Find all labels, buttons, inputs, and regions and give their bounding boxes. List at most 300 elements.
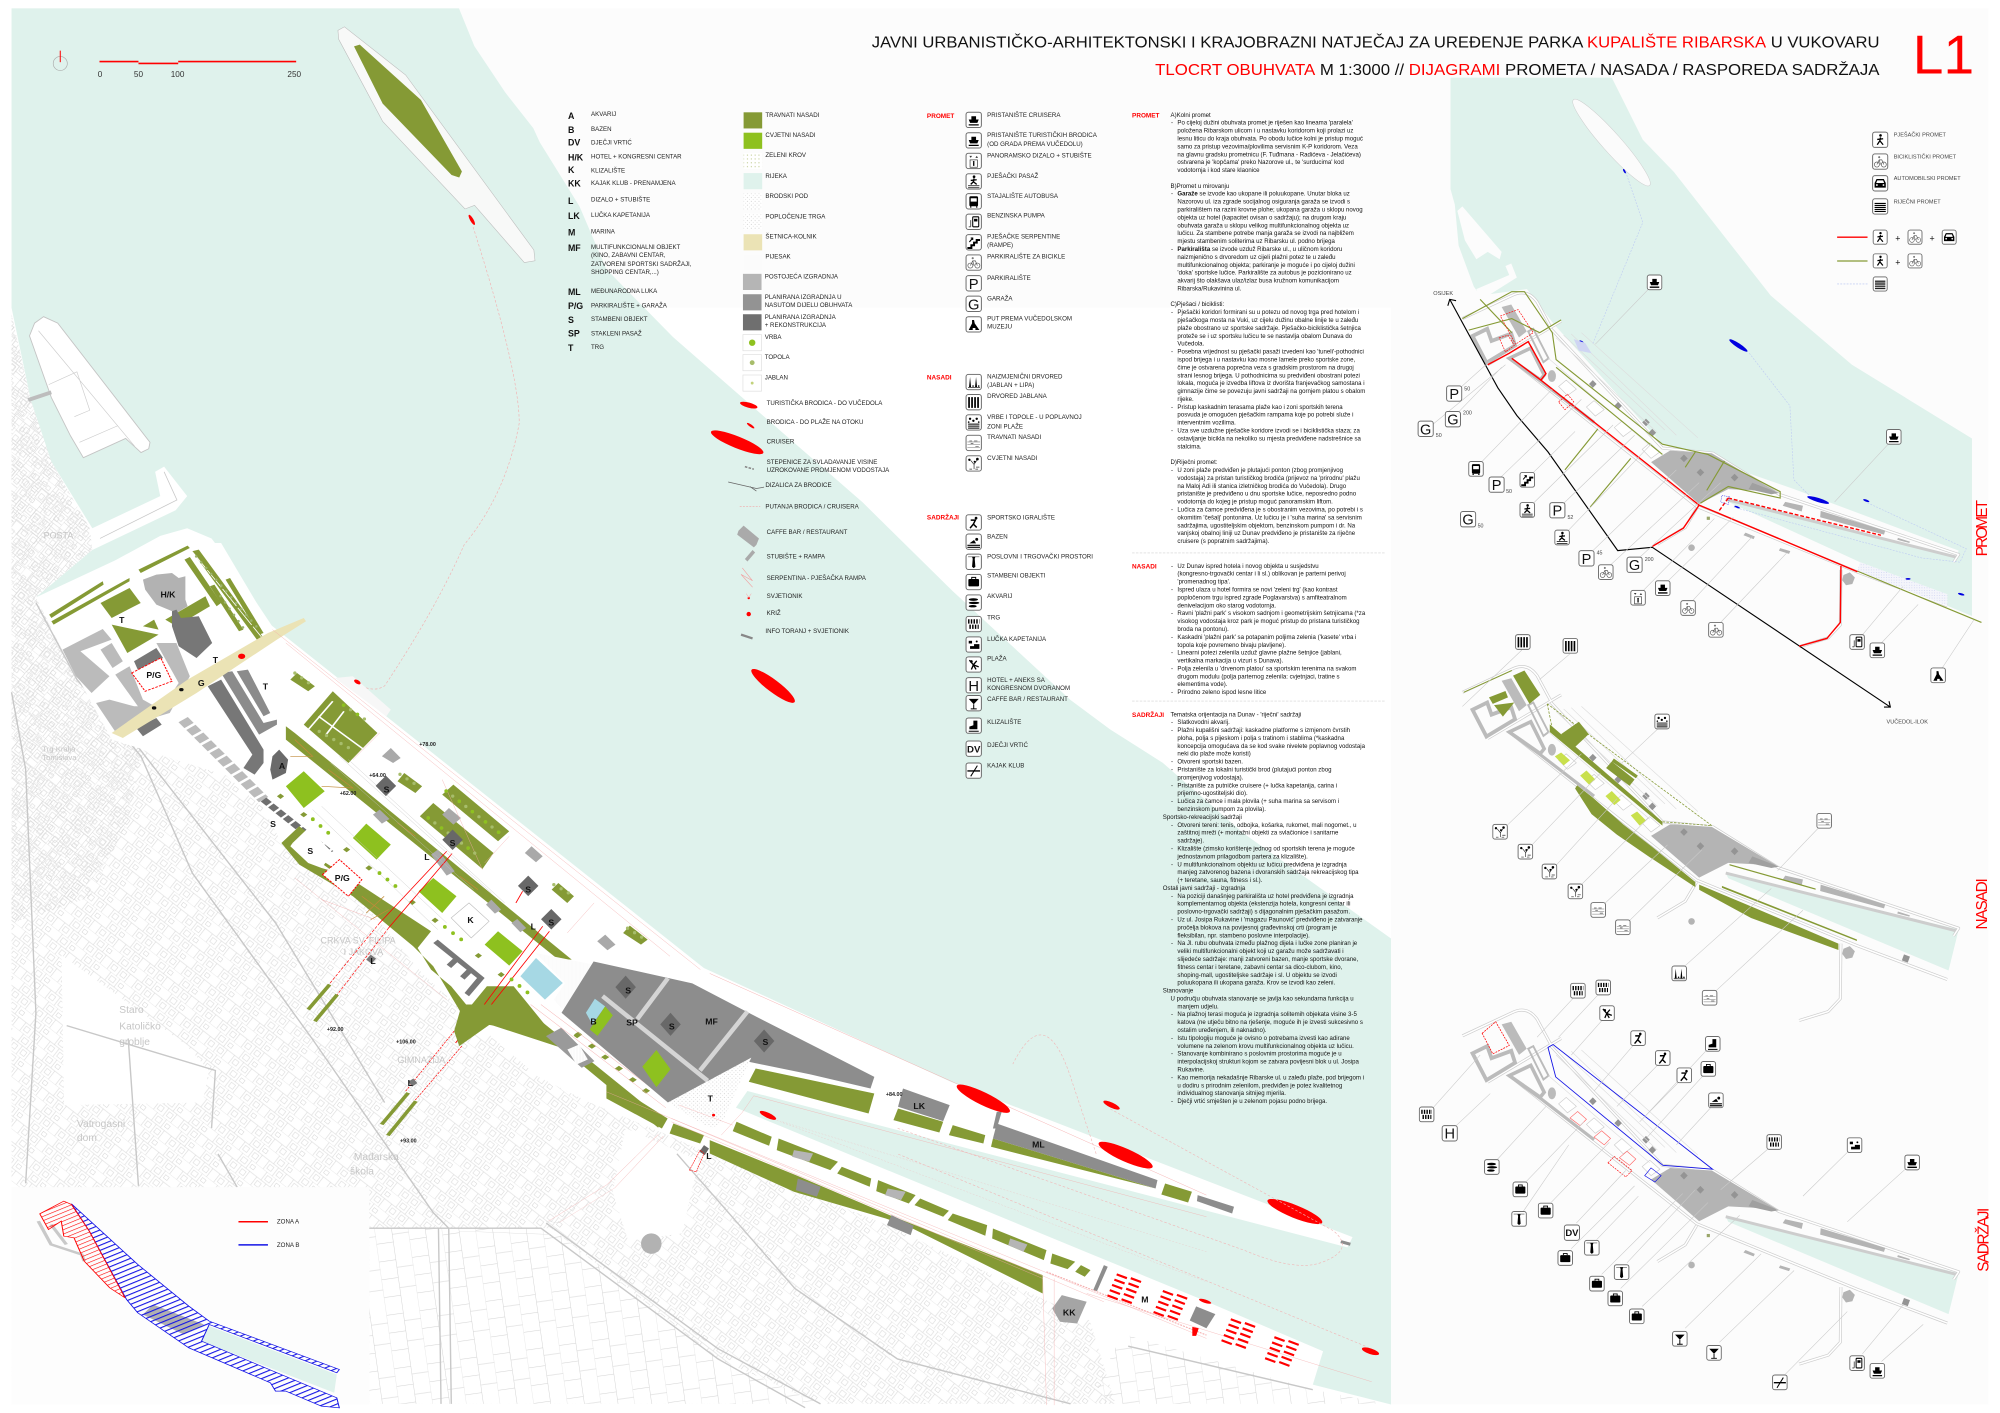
row [966,593,1012,610]
text block: promet: Ribarska/Rukavinina ul. [1177,285,1242,292]
icon: stairs [1520,472,1535,487]
row [966,172,1039,189]
row [966,294,1013,313]
plan building code labels: SP [626,1018,638,1028]
legend: building codes: DIZALO + STUBIŠTE [591,197,650,204]
plan building code labels: L [706,1151,712,1161]
legend: building codes: STAKLENI PASAŽ [591,330,642,338]
text block: promet: gimnazije čime se povezuju javni sadržaji na gornjem platou s obalom [1177,388,1365,395]
legend: building codes: HOTEL + KONGRESNI CENTAR [591,153,682,160]
icon: garage 50 [1461,512,1484,530]
icon: parking 50: P [1492,478,1501,494]
legend: materials and planting: CRUISER [767,439,794,446]
icon: parking 50: P [1449,387,1459,403]
text block: sadrzaji: ostalim uređenjem, ili naknadno). [1177,1027,1267,1034]
icon: passage [1520,503,1535,517]
text block: sadrzaji: fitness centar i teretane, zabavni centar sa dico-clubom, kino, [1177,964,1343,971]
row: AKVARIJ [987,593,1012,600]
text block: promet: A)Kolni promet [1171,112,1211,119]
text block: nasadi: Kaskadni 'plažni park' sa potapanim poljima zelenia ('kasete' vrba i [1177,634,1356,641]
row [966,112,1061,128]
scale bar: 0 [98,70,103,79]
red roads [1488,310,1881,646]
legend: pictograms sadrzaji [927,513,1093,778]
text block: sadrzaji: - [1171,1035,1173,1042]
icon: people [1571,983,1585,998]
legend: building codes: STAMBENI OBJEKT [591,316,648,323]
legend: building codes: LK [568,211,580,221]
grey place labels: I JAKOVA [344,947,383,957]
legend: building codes: S [568,315,574,325]
text block: sadrzaji: Na Jl. rubu obuhvata između plažnog dijela i lučke zone planiran je [1177,940,1358,947]
row: (JABLAN + LIPA) [987,382,1034,389]
text block: sadrzaji: komplementarnog objekta (ekstenzija hotela, kongresni centar ili [1177,901,1350,908]
row: POSLOVNI I TRGOVAČKI PROSTORI [987,553,1093,560]
row: PUT PREMA VUČEDOLSKOM [987,315,1072,322]
hatched dock strip [1857,562,1947,606]
legend: materials and planting [728,112,890,638]
legend: materials and planting: KRIŽ [767,609,781,617]
icon: passage [1555,530,1569,545]
elevation labels: +93.00 [400,1138,417,1144]
plan building code labels: G [198,678,205,688]
peninsula [1457,206,1502,259]
land base [12,308,1391,1404]
plan building code labels: S [307,846,313,856]
text block: promet: multifunkcionalnog objekta; parkiranje je moguće i po cijeloj dužini [1177,262,1355,269]
plan building code labels: S [450,838,456,848]
icon: parking 45: 45 [1597,550,1603,556]
text block: sadrzaji: - [1171,759,1173,766]
row [966,234,1060,250]
row [966,718,1021,733]
text block: sadrzaji: promjenjivog vodostaja). [1177,774,1244,781]
text block: sadrzaji: jednostavnom prilagodbom partera za klizalište). [1176,853,1308,860]
icon: fuel [1850,635,1864,649]
row [966,515,1055,530]
olive pedestrian and cycle routes [1462,292,1981,622]
icon: people [1767,1135,1781,1149]
plan building code labels: S [384,784,390,794]
swatch: pijesak [744,254,762,270]
text block: sadrzaji: - [1171,1051,1173,1058]
row: H [968,679,979,695]
row: STAMBENI OBJEKTI [987,573,1046,580]
elevation labels: +84.00 [886,1092,902,1098]
grey place labels [42,530,445,1177]
row [966,393,1048,410]
icon: suitcase [1608,1291,1623,1306]
text block: nasadi: Linearni potezi zelenila uzduž glavne plažne šetnjice (jablani, [1177,650,1342,657]
breakwater detail [100,472,177,538]
text block: promet: - [1171,404,1173,411]
row: P [969,277,979,293]
text block: sadrzaji: Sportsko-rekreacijski sadržaji [1163,814,1242,821]
row [966,213,1046,229]
symbol: island boat [746,422,755,429]
icon: ship [1870,643,1885,658]
plan building code labels: S [525,884,531,894]
text block: sadrzaji: poluukopana ili ukopana garaža. Krov se izvodi kao zeleni. [1177,980,1336,987]
elevation labels: +64.00 [369,773,386,779]
plan building code labels: T [119,615,125,625]
legend: materials and planting: TOPOLA [765,354,790,361]
legend: building codes: MEĐUNARODNA LUKA [591,288,658,295]
text block: nasadi: visokog vodostaja kroz park je moguć pristup do pristana turističkog [1177,618,1360,625]
legend: building codes: KAJAK KLUB - PRENAMJENA [591,180,677,187]
legend: building codes: M [568,228,575,238]
swatch: postojeca izgradnja [743,274,762,290]
icon: flowers [1493,824,1507,839]
main plan: hotel district [45,543,447,1000]
text block: promet: parkiralištem na razini krovne plohe; ukopana garaža u sklopu novog [1177,207,1363,214]
text block: promet: mjestu stambenim soliterima uz Ribarsku ul. podno brijega [1177,238,1335,245]
swatch: poplocenje [744,213,762,230]
grey place labels: dom [77,1133,97,1144]
diagram: nasadi [1462,635,1959,1021]
text block: promet: sadržajima, ugostiteljskim objektom, benzinskom pumpom i dr. Na [1177,522,1356,529]
combo: red line: + [1930,234,1935,244]
text block: sadrzaji: - [1171,940,1173,947]
row [966,614,1000,632]
legend: building codes: SP [568,329,580,339]
row [966,677,1070,695]
swatch: planirana rekonstrukcija [743,314,762,330]
text block: promet: - [1171,349,1173,356]
plan building code labels: P/G [335,873,350,883]
marina boats and cruisers [709,426,1380,1357]
text block: sadrzaji: Rukavine. [1177,1066,1205,1073]
row: STAJALIŠTE AUTOBUSA [987,193,1059,200]
icon: bike [1598,565,1613,579]
text block: nasadi: broda na pontonu). [1177,626,1229,633]
icon: garage 200 [1627,557,1654,574]
text block: sadrzaji: - [1171,893,1173,900]
symbol: lighthouse [746,594,751,599]
row [966,455,1038,471]
icon: garage 200: G [1629,558,1640,574]
legend: building codes: MULTIFUNKCIONALNI OBJEKT [591,244,681,251]
zone legend: ZONA B [277,1242,299,1249]
text block: promet: ostvarena je 'kopčama' preko Nazorove ul., te 'surducima' kod [1177,159,1344,166]
symbol: serpentine [741,568,753,587]
zone legend [238,1219,300,1249]
icon: ship [1887,429,1901,444]
plan building code labels: A [279,761,286,771]
grey place labels: CRKVA SV. FILIPA [321,936,396,946]
legend: materials and planting: SVJETIONIK [767,593,803,600]
main plan: park olive strips and parcels [270,630,700,1043]
plan building code labels: H/K [160,589,176,599]
text block: sadrzaji: - [1171,719,1173,726]
text block: promet: lučicu. Za stambene potrebe manja garaža se izvodi na najbližem [1177,230,1354,237]
river Danube and Vuka [12,8,1391,1404]
legend: building codes: ZATVORENI SPORTSKI SADRŽAJI, [591,260,692,268]
plan building code labels: S [669,1021,675,1031]
basin [1726,1217,1959,1314]
scale bar [98,62,302,79]
legend: pictograms nasadi [927,374,1082,471]
legend: pictograms sadrzaji: SADRŽAJI [927,513,959,522]
map: city cadastral background [12,314,1387,1408]
title [872,34,1880,79]
island outline [1566,93,1657,192]
row [966,553,1093,569]
marina service building [1190,1306,1215,1328]
icon: parking 52: P [1552,504,1562,520]
text block: sadrzaji: Tematska orijentacija na Dunav - 'riječni' sadržaji [1171,711,1301,718]
text block: promet: obuhvata garaža u sklopu velikog multifunkcionalnog objekta uz [1177,222,1349,229]
text block: nasadi: - [1171,650,1173,657]
grey place labels: GIMNAZIJA [397,1055,445,1065]
legend: building codes: B [568,125,574,135]
text block: sadrzaji: Pristanište za putničke cruisere (+ lučka kapetanija, carina i [1177,782,1337,789]
row: PRISTANIŠTE CRUISERA [987,112,1061,119]
legend: materials and planting: BRODSKI POD [765,193,809,200]
text block: sadrzaji: slijedeće sadržaje: manji zatvoreni bazen, manje sportske dvorane, [1177,956,1358,963]
icon: suitcase [1513,1182,1528,1197]
row: BENZINSKA PUMPA [987,213,1046,220]
legend: building codes: (KINO, ZABAVNI CENTAR, [591,252,666,259]
icon: garage 50 [1418,421,1442,439]
base plan [1462,667,1959,1021]
boat route dashed line [362,227,519,689]
icon: flowers [1518,844,1533,859]
text block: promet: okomitim 'češalj' pontonima. Uz lučicu je i 'suha marina' sa servisnim [1177,514,1362,521]
icon: skating [1705,1037,1720,1051]
text block: sadrzaji: Na poziciji današnjeg parkirališta uz hotel predviđena je izgradnja [1177,893,1354,900]
grey place labels: Staro [119,1005,144,1016]
icon: tie [1585,1240,1599,1255]
row: (RAMPE) [987,242,1013,249]
icon: garage 50: G [1420,422,1431,438]
text block: promet: se izvode uzduž Ribarske ul., u uličnom koridoru [1210,246,1342,253]
icon: harbour [1847,1138,1862,1153]
text block: sadrzaji: (+ teretane, sauna, fitness i sl.). [1177,877,1263,884]
plan building code labels: S [625,986,631,996]
text block: promet: položena Ribarskom ulicom i u nastavku koridorom koji prolazi uz [1177,128,1353,135]
legend: materials and planting: TRAVNATI NASADI [765,112,820,119]
text block: sadrzaji: manjem udjelu. [1177,1003,1219,1010]
row: CAFFE BAR / RESTAURANT [987,696,1068,703]
text block: sadrzaji: interpolacijskoj strukturi kojom se zatvara povijesni blok u ul. Josipa [1177,1059,1359,1066]
text block: nasadi [1132,563,1367,696]
icon: lift [1631,590,1645,605]
legend row: cycling: BICIKLISTIČKI PROMET [1894,154,1957,161]
island with planting [338,27,535,263]
row: TRAVNATI NASADI [987,434,1041,441]
text block: promet: na Maloj Adi ili stanica izletničkog brodića do Vučedola). Drugo [1177,483,1347,490]
text block: nasadi: Ispred ulaza u hotel formira se novi 'zeleni trg' (kao kontrast [1177,586,1338,593]
icon: tie [1512,1212,1526,1226]
legend: pictograms nasadi: NASADI [927,374,952,381]
plan building code labels: L [408,1078,414,1088]
icon: people [1596,980,1611,995]
row: KAJAK KLUB [987,763,1024,770]
multifunctional building MF [562,962,874,1103]
marina and pier parcels [606,973,1372,1405]
text block: sadrzaji: koncepcija omogućava da se kod svake nivelete poplavnog vodostaja [1177,743,1366,750]
text block: nasadi: denivelacijom oko starog vodotornja. [1177,602,1276,609]
text block: nasadi: Polja zelenila u 'drvenom platou' sa sportskim terenima na svakom [1177,665,1356,672]
text block: promet: naizmjenično s drvoredom uz cijeli plažni potez te u zaleđu [1177,254,1336,261]
row: MUZEJU [987,324,1012,331]
swatch: rijeka [744,173,762,189]
text block: sadrzaji: SADRŽAJI [1132,710,1164,719]
row: BAZEN [987,534,1008,541]
text block: sadrzaji: manjeg zatvorenog bazena i dvoranskih sadržaja rekreacijskog tipa [1177,869,1359,876]
text block: sadrzaji: Slatkovodni akvarij. [1177,719,1230,726]
icon: bike [1709,622,1723,637]
legend: materials and planting: + REKONSTRUKCIJA [765,322,827,329]
promet legend [1837,132,1961,291]
row: PRISTANIŠTE TURISTIČKIH BRODICA [987,132,1097,139]
swatch: planirana izgradnja nasip [743,294,762,310]
icon: cocktail [1673,1331,1687,1346]
text block: sadrzaji: Istu tipologiju moguće je ovisno o potrebama izvesti kao adirane [1177,1035,1350,1042]
leader lines [1432,992,1923,1374]
text block: sadrzaji: - [1171,861,1173,868]
river in promet diagram [1450,78,1972,616]
text block: promet: C)Pješaci / biciklisti: [1171,301,1225,308]
text block: sadrzaji: - [1171,917,1173,924]
legend row: pedestrian: PJEŠAČKI PROMET [1894,132,1947,139]
tree rows [196,556,644,996]
swatch: topola [743,355,762,371]
icon: poplars [1516,635,1530,649]
text block: sadrzaji: benzinskom pumpom za plovila). [1177,806,1266,813]
legend: building codes: PARKIRALIŠTE + GARAŽA [591,301,668,309]
text block: sadrzaji: - [1171,767,1173,774]
text block: promet: proteže se i uz sportsku lučicu te se nastavlja obalom Dunava do [1177,333,1353,340]
plan building code labels [119,589,1148,1317]
row: G [968,297,979,313]
icon: suitcase [1558,1251,1573,1265]
text block: promet: Pješački koridori formirani su u potezu od novog trga pred hotelom i [1177,309,1359,316]
grey place labels: Vatrogasni [77,1119,125,1130]
row [966,655,1008,672]
text block: sadrzaji: Na plažnoj terasi moguća je izgradnja solitemih objekata visine 3-5 [1177,1011,1357,1018]
text block: sadrzaji: Klizalište (zimsko korištenje jednog od sportskih terena je moguće [1177,845,1355,852]
legend: pictograms promet: PROMET [927,113,954,120]
icon: willow [1655,714,1669,729]
row [966,132,1098,148]
plan building code labels: T [263,682,269,692]
legend: building codes: AKVARIJ [591,111,616,118]
icon: people [1419,1107,1434,1122]
text block: promet: ostavljanje bicikla na nekoliko su mjesta predviđene nadstrešnice sa [1177,435,1362,442]
icon: hotel [1442,1126,1457,1143]
icon: parking 50 [1489,477,1512,495]
text block: promet: lesnu liticu do kraja obuhvata. Po obodu lučice kolni je pristup moguć [1177,135,1363,142]
swatch: setnica [744,234,762,250]
title: JAVNI URBANISTIČKO-ARHITEKTONSKI I KRAJOBRAZNI NATJEČAJ ZA UREĐENJE PARKA KUPALIŠTE RIBARSKA U VUKOVARU [872,34,1879,51]
text block: promet: ispod brijega i u nastavku kao mosne lamele preko sportske zone, [1177,356,1355,363]
plan building code labels: K [467,915,474,925]
icon: cocktail [1707,1346,1721,1360]
icon: bus [1469,462,1483,476]
plan building code labels: S [270,819,276,829]
row [966,414,1082,430]
row: KLIZALIŠTE [987,719,1021,726]
icon: ship [1655,581,1670,596]
legend: materials and planting: RIJEKA [765,173,788,180]
text block: sadrzaji: - [1171,845,1173,852]
peninsula outline [29,317,150,458]
black main road with arrows [1448,299,1890,707]
scale bar: 250 [287,70,302,79]
icon: grass [1817,813,1831,828]
glass passage SP and dividers [603,978,747,1081]
legend: materials and planting: ŠETNICA-KOLNIK [765,233,817,240]
row [966,374,1063,390]
text block: promet: stalcima. [1177,443,1202,450]
flower fields [1555,753,1646,826]
text block: nasadi: - [1171,689,1173,696]
icon: fish [1485,1160,1499,1174]
swatch: jablan [743,375,762,391]
legend: pictograms promet [927,112,1098,332]
icon: bike [1681,601,1695,615]
icon: grass [1591,903,1605,917]
plan building code labels: ML [1032,1139,1045,1149]
text block: sadrzaji: - [1171,1098,1173,1105]
scale bar: 100 [171,70,185,79]
text block: sadrzaji: Pristanište za lokalni turistički brod (plutajući ponton zbog [1177,767,1331,774]
text block: promet: - [1171,191,1173,198]
icon: kindergarten [1564,1225,1579,1240]
legend: materials and planting: SERPENTINA - PJEŠAČKA RAMPA [767,575,867,582]
icon: grass [1616,920,1630,935]
icon: sport [1677,1068,1692,1083]
grey place labels: POSTA [44,530,73,540]
text block: nasadi: Uz Dunav ispred hotela i novog objekta u susjedstvu [1177,563,1319,570]
side label: nasadi: NASADI [1974,878,1991,929]
combo: olive line [1837,254,1922,268]
text block: nasadi: - [1171,586,1173,593]
legend: materials and planting: POSTOJEĆA IZGRADNJA [765,273,839,280]
cream bridge promenade [112,618,306,738]
text block: sadrzaji: Uz ul. Josipa Rukavine i 'magazu Paunović' predviđeno je zatvaranje [1177,917,1363,924]
plan building code labels: S [548,918,554,928]
side label: sadrzaji: SADRŽAJI [1975,1208,1992,1272]
main plan: slope band, south lift bridge [382,1004,674,1234]
row: PLAŽA [987,655,1008,663]
icon: flowers [1568,884,1583,899]
row [966,254,1065,270]
icon: garage 200 [1445,411,1472,429]
symbol: caffe bar [737,526,759,547]
combo: red line: + [1895,234,1900,244]
text block: sadrzaji: - [1171,1011,1173,1018]
panel: zone inset map [12,1187,369,1408]
grey place labels: škola [350,1166,374,1177]
legend: materials and planting: STUBIŠTE + RAMPA [767,553,826,560]
icon: parking 50: 50 [1506,489,1512,495]
icon: suitcase [1538,1203,1553,1218]
legend: building codes: ML [568,287,581,297]
row: TRG [987,614,1000,621]
icon: parking 50: 50 [1464,386,1470,392]
leader lines [1432,284,1974,670]
row [966,153,1092,169]
text block: promet: samo za pristup vezovima/plovilima servisnim K-P koridorom. Veza [1177,143,1358,150]
legend: building codes: MF [568,243,581,253]
icon: garage 50: 50 [1436,433,1442,439]
text block: promet [1132,112,1367,545]
text block: sadrzaji: poslovno-trgovački sadržaji) s dijagonalnim pješačkim pasažom. [1177,909,1350,916]
row: VRBE I TOPOLE - U POPLAVNOJ [987,414,1082,421]
